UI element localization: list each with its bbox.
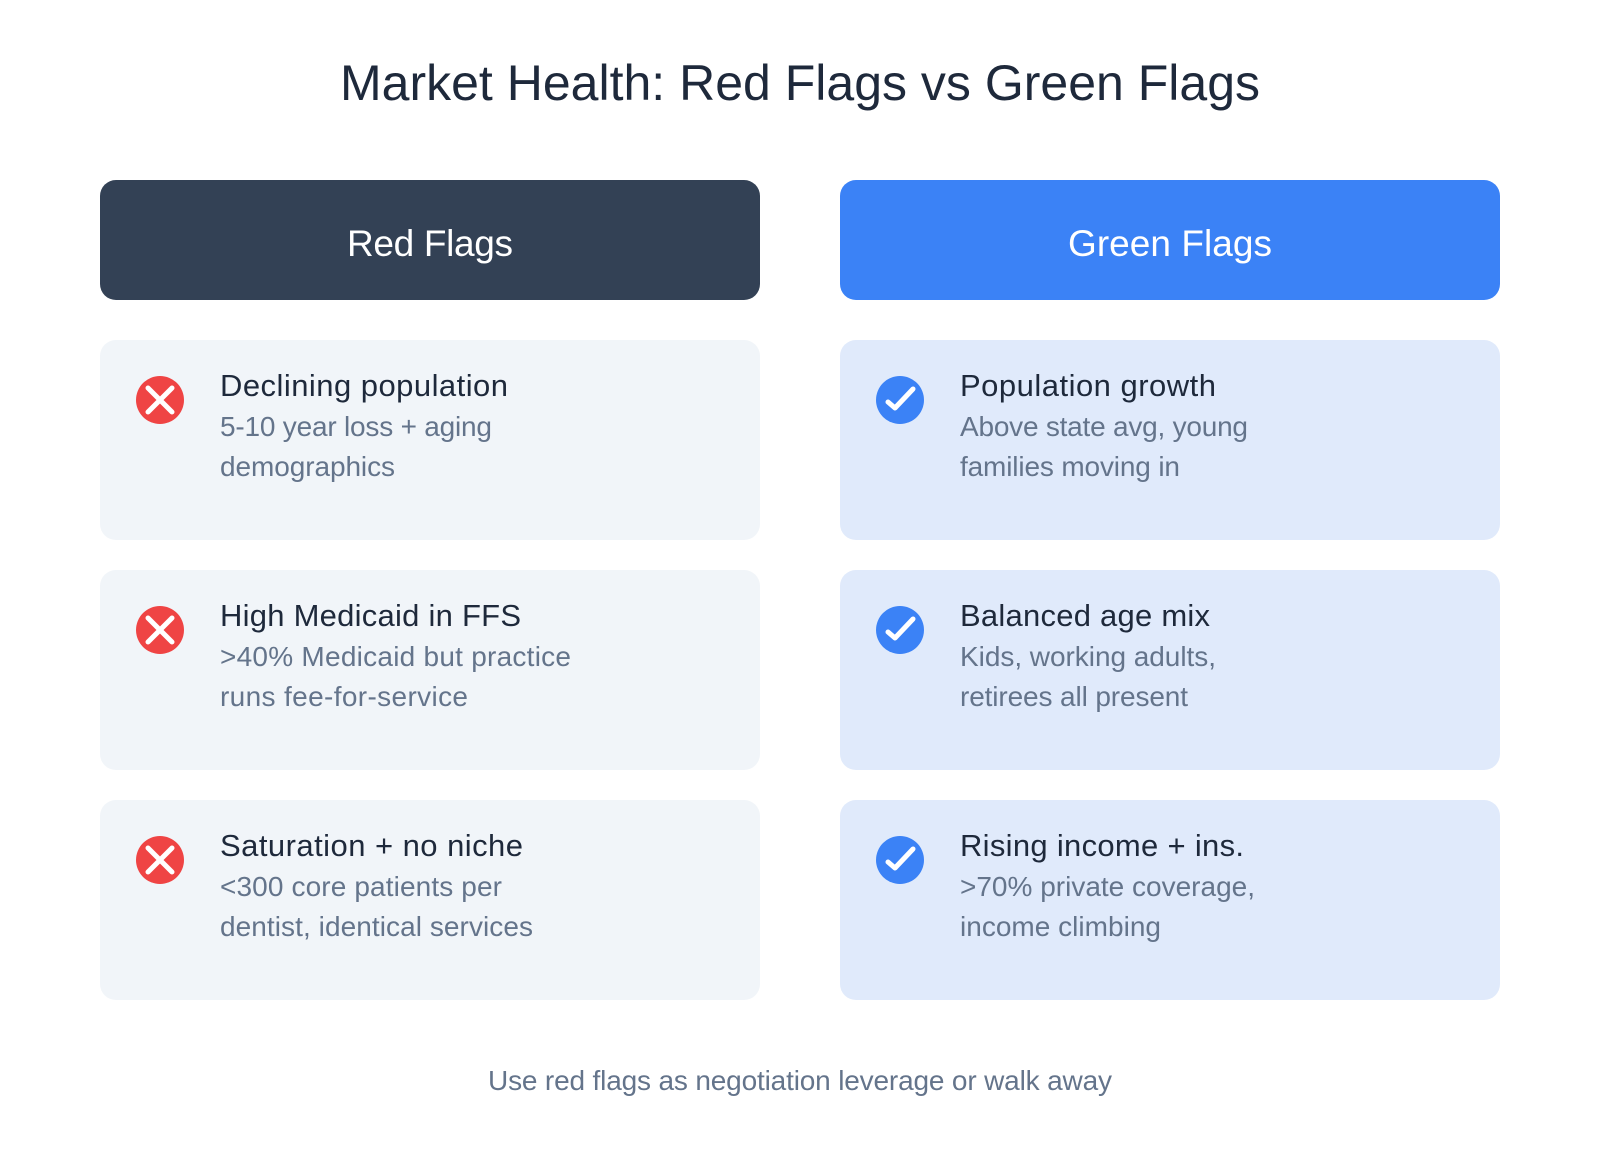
card: high medicaid: [100, 570, 760, 770]
card text: Balanced age mix: [960, 598, 1210, 633]
panel: red flags header: Red Flags: [347, 223, 513, 264]
icon: red cross: [136, 836, 184, 884]
card: population growth: [840, 340, 1500, 540]
card: balanced age mix: [840, 570, 1500, 770]
icon: red cross: [136, 376, 184, 424]
card: rising income: [840, 800, 1500, 1000]
card: saturation: [100, 800, 760, 1000]
card text: Population growth: [960, 368, 1216, 403]
card text: Kids, working adults,: [960, 641, 1216, 672]
panel: green flags header: Green Flags: [1068, 223, 1272, 264]
card text: Rising income + ins.: [960, 828, 1244, 863]
card text: [220, 828, 533, 942]
card text: 5-10 year loss + aging: [220, 411, 492, 442]
card text: >40% Medicaid but practice: [220, 641, 571, 672]
icon: red cross: [136, 606, 184, 654]
card text: retirees all present: [960, 681, 1188, 712]
card text: income climbing: [960, 911, 1161, 942]
card text: demographics: [220, 451, 395, 482]
card text: families moving in: [960, 451, 1180, 482]
card text: [960, 368, 1248, 482]
card text: [960, 828, 1255, 942]
card text: Above state avg, young: [960, 411, 1248, 442]
panel: green flags header: [840, 180, 1500, 300]
card text: High Medicaid in FFS: [220, 598, 521, 633]
icon: blue check: [876, 606, 924, 654]
card text: [960, 598, 1216, 712]
panel: red flags header: [100, 180, 760, 300]
card text: dentist, identical services: [220, 911, 533, 942]
title: Market Health: Red Flags vs Green Flags: [340, 55, 1260, 111]
footer note: Use red flags as negotiation leverage or walk away: [488, 1065, 1112, 1096]
card text: Saturation + no niche: [220, 828, 523, 863]
card text: >70% private coverage,: [960, 871, 1255, 902]
card text: runs fee-for-service: [220, 681, 468, 712]
icon: blue check: [876, 376, 924, 424]
card text: [220, 368, 508, 482]
card text: Declining population: [220, 368, 508, 403]
card text: <300 core patients per: [220, 871, 502, 902]
icon: blue check: [876, 836, 924, 884]
card text: [220, 598, 571, 712]
card: declining population: [100, 340, 760, 540]
